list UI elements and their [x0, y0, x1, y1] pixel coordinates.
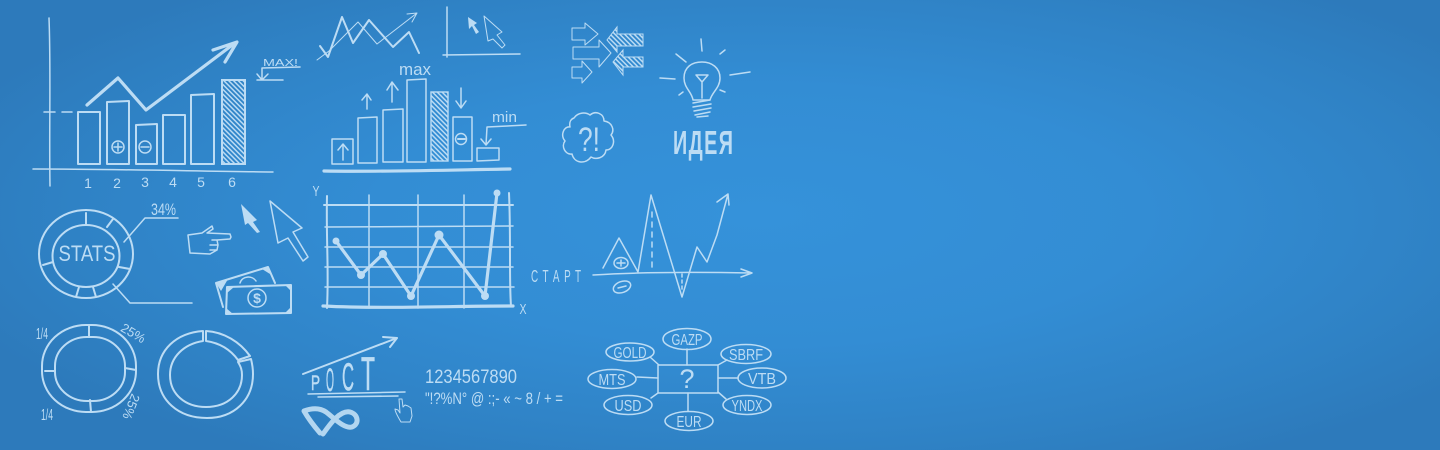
max label: max [399, 60, 431, 79]
grid [325, 195, 514, 308]
ribbon [304, 409, 357, 434]
hill and line [603, 194, 729, 297]
node USD: USD [614, 398, 642, 415]
axis [593, 269, 752, 277]
data line [336, 193, 497, 296]
node SBRF: SBRF [729, 347, 763, 364]
icon: money [216, 267, 291, 314]
growth sketch [303, 337, 412, 434]
axes [33, 18, 273, 186]
arrows [338, 82, 466, 160]
rays [660, 39, 750, 95]
min label [481, 109, 526, 145]
hatched bar [431, 92, 448, 161]
labels: 1/4 [36, 326, 48, 343]
growth sketch: Т [361, 347, 375, 400]
axis labels: Y [312, 182, 320, 199]
axis labels: X [519, 300, 527, 317]
cloud with question and exclamation: ?! [578, 121, 600, 159]
axis labels [84, 174, 236, 191]
bar chart with rising arrow [33, 18, 300, 191]
node VTB: VTB [748, 371, 776, 388]
cursor outline [484, 16, 505, 48]
plus sign [614, 258, 628, 268]
axis labels: 4 [169, 174, 177, 190]
idea caption: ИДЕЯ [673, 124, 733, 161]
axis labels: 6 [228, 174, 236, 190]
center box [658, 364, 718, 394]
node MTS [588, 370, 636, 389]
underlines [308, 392, 405, 397]
node EUR [665, 412, 713, 431]
labels: 1/4 [41, 407, 53, 424]
rising arrow [87, 42, 237, 110]
icon: pointing hand [188, 226, 231, 254]
bars [78, 94, 214, 164]
node YNDX [723, 396, 771, 415]
axis labels: 5 [197, 174, 205, 190]
line chart on grid [312, 182, 527, 317]
labels: 25% [119, 392, 143, 422]
mind map [588, 328, 786, 431]
font sample symbols: "!?%N° @ :;- « ~ 8 / + = [425, 389, 563, 408]
arrows converging [572, 23, 643, 83]
node MTS: MTS [598, 372, 626, 389]
word: Р [311, 372, 320, 395]
font sample digits: 1234567890 [425, 367, 517, 388]
cursor filled [468, 17, 479, 34]
axis labels [312, 182, 527, 317]
stats label: STATS [58, 241, 116, 266]
word: С [342, 356, 354, 399]
axis labels: 3 [141, 174, 149, 190]
cursor filled [241, 204, 260, 233]
node GOLD: GOLD [614, 345, 646, 362]
max label [257, 57, 300, 80]
center box: ? [679, 364, 695, 394]
data points [332, 190, 500, 300]
leader lines [113, 218, 192, 303]
labels: 25% [118, 320, 149, 346]
percent label: 34% [151, 200, 176, 219]
hand cursor [395, 399, 412, 422]
arrow [303, 337, 397, 374]
max label: MAX! [263, 57, 298, 69]
dashed level [44, 111, 72, 113]
quarter ring chart [36, 320, 149, 424]
zigzag line sketch [317, 13, 419, 60]
node GAZP: GAZP [672, 332, 702, 349]
node USD [604, 396, 652, 415]
segmented ring [158, 331, 253, 418]
minus sign [456, 134, 466, 144]
stats ring [39, 200, 192, 303]
minus sign [612, 279, 632, 295]
node VTB [738, 368, 786, 388]
axis labels: 1 [84, 175, 92, 191]
start line sketch [531, 194, 752, 297]
icon: light bulb [660, 39, 750, 117]
icon: money: $ [253, 290, 261, 306]
baseline [324, 169, 510, 171]
hatched bar [222, 80, 245, 164]
max min bar chart [324, 60, 526, 171]
labels [36, 320, 149, 424]
cloud with question and exclamation [563, 113, 613, 162]
axis labels: 2 [113, 175, 121, 191]
corner axes with cursors [443, 7, 520, 57]
start label: СТАРТ [531, 267, 581, 287]
node EUR: EUR [676, 414, 702, 431]
cursor outline [270, 201, 308, 261]
node GAZP [663, 328, 711, 350]
node YNDX: YNDX [732, 398, 763, 415]
word [311, 347, 375, 400]
connectors [637, 349, 738, 411]
plus and minus signs [112, 141, 151, 153]
min label: min [492, 109, 517, 126]
word: О [326, 362, 334, 398]
